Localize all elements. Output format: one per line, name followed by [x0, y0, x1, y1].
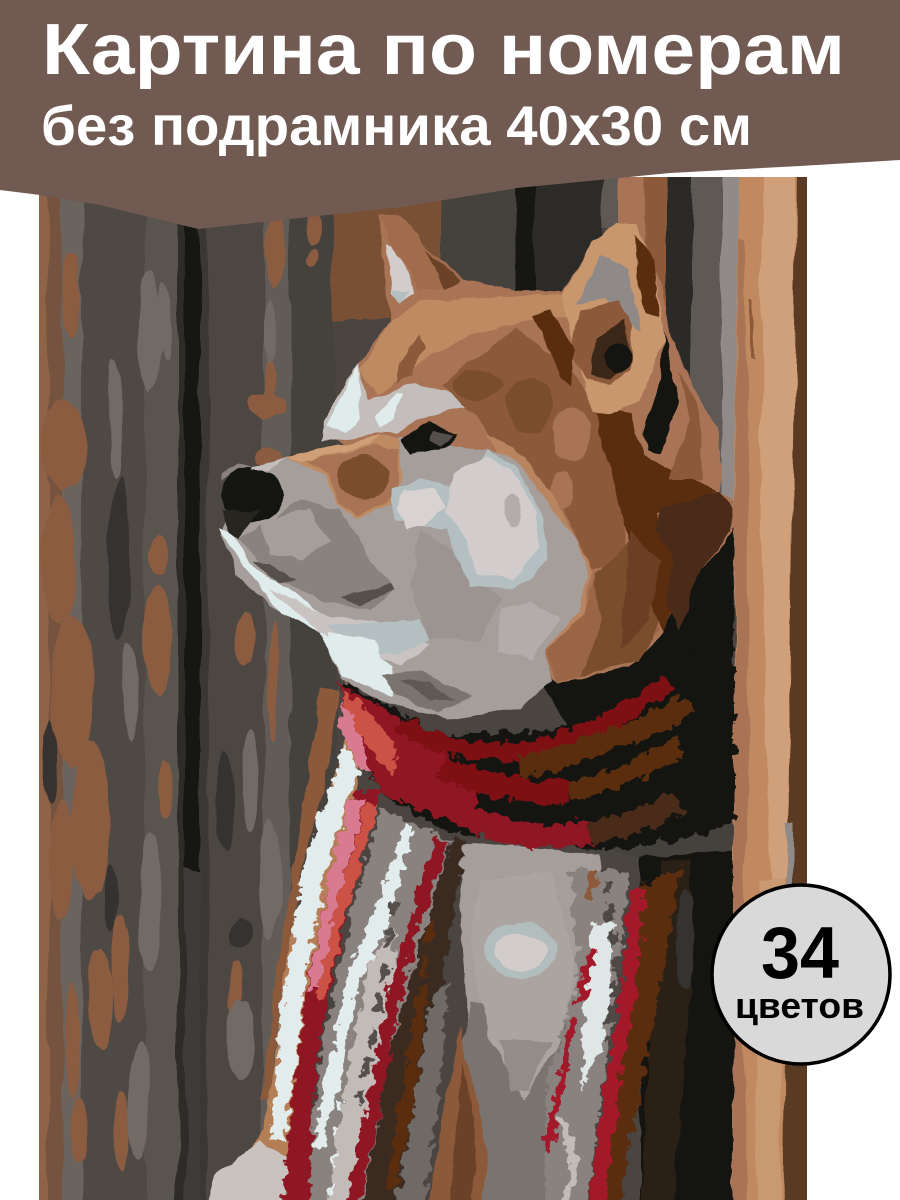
- lower cheek brown: [548, 560, 660, 682]
- dog body and scarf tails: [205, 640, 680, 1200]
- left ear shading: [379, 213, 464, 290]
- muzzle brown patch: [286, 435, 402, 517]
- black fur behind ear: [643, 333, 679, 453]
- painting: shiba inu in a red scarf: [30, 170, 820, 1200]
- mouth lines: [254, 563, 295, 583]
- eye: [400, 422, 457, 455]
- lighter face patches: [410, 530, 500, 640]
- rust fold below ear: [535, 310, 575, 385]
- dog head: [220, 213, 732, 720]
- right ear outer: [561, 223, 664, 415]
- right ear grey inner: [576, 255, 642, 332]
- dog neck and chest shadow: [540, 530, 733, 1200]
- mid brown crown and cheek: [440, 328, 625, 570]
- badge number: 34: [761, 913, 839, 994]
- cheek small grey mark: [506, 494, 520, 526]
- blue grey under white cheek: [392, 450, 548, 590]
- header banner: [0, 0, 900, 229]
- scarf wrapped around neck: [338, 620, 733, 850]
- head brown silhouette: [325, 213, 732, 683]
- rust neck fur: [593, 407, 718, 633]
- forehead tan: [358, 295, 590, 395]
- scarf band three: [465, 815, 590, 836]
- white chin strip: [220, 527, 393, 697]
- grey face: [221, 437, 588, 720]
- right ear rust edge: [634, 233, 659, 317]
- darker and lighter plank marks: [107, 270, 281, 1160]
- white brow: [323, 363, 466, 440]
- center chest fur: [427, 840, 600, 1200]
- badge label: цветов: [735, 985, 864, 1026]
- left scarf tail stripes: [270, 745, 466, 1200]
- brow shading: [395, 335, 425, 385]
- badge: 34 colours: [712, 885, 890, 1064]
- right tan wood post: [730, 177, 807, 1200]
- scarf band two: [440, 765, 570, 792]
- scarf left knot: [338, 682, 480, 830]
- scarf band one: [400, 682, 668, 752]
- nose: [221, 468, 283, 522]
- cheek tan band: [486, 433, 592, 648]
- scarf dark base: [345, 620, 733, 850]
- left ear inner white: [386, 243, 416, 300]
- subtitle: без подрамника 40х30 см: [41, 94, 752, 157]
- wood drips left: [42, 205, 321, 1170]
- right ear dark inner: [570, 300, 632, 385]
- orange fur strip on left of body: [208, 680, 358, 1200]
- white cheek: [443, 457, 539, 580]
- right scarf tail stripes: [546, 867, 680, 1200]
- dark jaw fur: [655, 493, 732, 630]
- white cheek left blob: [398, 487, 443, 530]
- title: Картина по номерам: [42, 10, 845, 90]
- lower muzzle shade: [240, 500, 395, 610]
- painted wooden plank background: [39, 177, 740, 1200]
- lower lip shadow: [379, 670, 470, 715]
